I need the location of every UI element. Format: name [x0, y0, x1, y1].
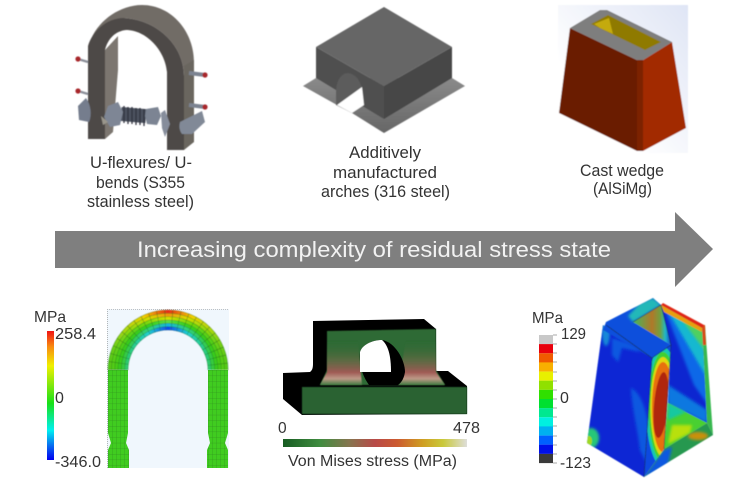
scale title: Von Mises stress (MPa) — [288, 453, 457, 470]
left wall — [316, 47, 384, 119]
plot background — [107, 309, 229, 468]
pin lower right — [189, 105, 205, 107]
caption: arches: manufactured — [333, 164, 437, 182]
pin lower left — [78, 91, 88, 94]
U-flexure back surface — [88, 5, 194, 149]
stepped colour bar — [539, 335, 557, 463]
colour bar values: -346.0 — [55, 454, 101, 471]
legend label: MPa — [34, 309, 66, 326]
scale minimum: 0 — [278, 420, 287, 437]
top collar — [603, 297, 671, 358]
panel: cast wedge 3D model — [558, 5, 688, 153]
caption: U-flexures: U-flexures/ U- — [90, 154, 192, 172]
base front stress surface — [302, 387, 467, 414]
colour bar — [47, 331, 54, 460]
panel: wedge FE stress model — [583, 295, 715, 480]
plot frame — [108, 310, 229, 468]
panel: arch von Mises stress plot — [278, 319, 480, 470]
legend values — [560, 326, 591, 472]
panel: U-flexure 3D model — [75, 5, 208, 150]
U-flexure inner face — [105, 36, 118, 139]
arrow: increasing complexity: Increasing complexity of residual stress state — [137, 237, 611, 262]
U mesh right leg — [207, 370, 228, 468]
U-flexure front face — [88, 18, 184, 150]
legend values: -123 — [560, 455, 591, 472]
legend values: 0 — [560, 390, 569, 407]
left fillet stress — [320, 340, 362, 385]
back inner wall — [661, 306, 708, 424]
clamp right — [179, 111, 205, 134]
right outer strip — [702, 325, 713, 435]
black model body — [283, 319, 467, 415]
white see-through area — [360, 340, 391, 372]
corner fillet — [637, 60, 643, 151]
caption: U-flexures: stainless steel) — [87, 193, 194, 211]
floor hot area — [668, 425, 692, 444]
clamp left — [78, 98, 91, 122]
colour bar values — [55, 326, 101, 471]
inner rear-left wall — [633, 305, 671, 345]
threaded rod — [120, 107, 147, 123]
U mesh arch — [108, 310, 228, 370]
caption: U-flexures — [87, 154, 194, 211]
pin top left — [78, 59, 88, 62]
left face — [559, 28, 637, 151]
pin top right — [189, 73, 205, 75]
orange top rim — [661, 305, 702, 332]
right strip hot spot — [702, 325, 706, 345]
right fillet stress — [398, 340, 445, 385]
bottom outer face — [644, 422, 714, 478]
top face — [570, 10, 672, 60]
caption: arches: arches (316 steel) — [321, 183, 450, 201]
caption: cast wedge: (AlSiMg) — [593, 180, 652, 198]
right wall — [384, 47, 452, 119]
panel: wedge FE stress legend — [532, 310, 591, 472]
model background — [558, 5, 688, 153]
cut face with hot spot — [644, 345, 672, 477]
flange — [303, 78, 465, 133]
left outer face — [586, 324, 652, 478]
rod threads — [124, 106, 144, 126]
stress colour bar — [283, 439, 467, 447]
cavity floor — [594, 18, 613, 34]
nut middle — [145, 107, 161, 125]
red top rim — [661, 303, 704, 328]
arch inner wall — [336, 73, 364, 113]
nut left — [104, 102, 123, 127]
colour bar values: 0 — [55, 390, 64, 407]
caption: arches — [321, 144, 450, 201]
scale maximum: 478 — [453, 420, 480, 437]
legend label: MPa — [532, 310, 563, 327]
legend values: 129 — [561, 326, 586, 343]
panel: additively manufactured arch 3D model — [303, 7, 465, 133]
arch hole — [360, 340, 405, 385]
mesh edge lines — [606, 305, 671, 477]
floor cool band — [668, 403, 686, 420]
panel: U-flexure FE stress plot — [34, 309, 229, 471]
caption: cast wedge: Cast wedge — [580, 162, 664, 180]
cavity floor — [664, 403, 707, 449]
caption: arches: Additively — [349, 144, 422, 162]
washer — [101, 116, 108, 125]
U-flexure right side face — [184, 60, 194, 150]
caption: cast wedge — [580, 162, 664, 198]
right face — [643, 42, 686, 151]
notch in flange — [337, 87, 364, 113]
top face — [316, 7, 452, 86]
colour bar values: 258.4 — [55, 326, 96, 343]
cavity — [591, 15, 661, 50]
U mesh left leg — [108, 370, 129, 468]
arrow: increasing complexity — [55, 212, 713, 287]
caption: U-flexures: bends (S355 — [96, 174, 185, 192]
upper wall stress surface — [320, 329, 445, 385]
red pin tips — [75, 56, 208, 110]
nut right — [161, 110, 170, 137]
